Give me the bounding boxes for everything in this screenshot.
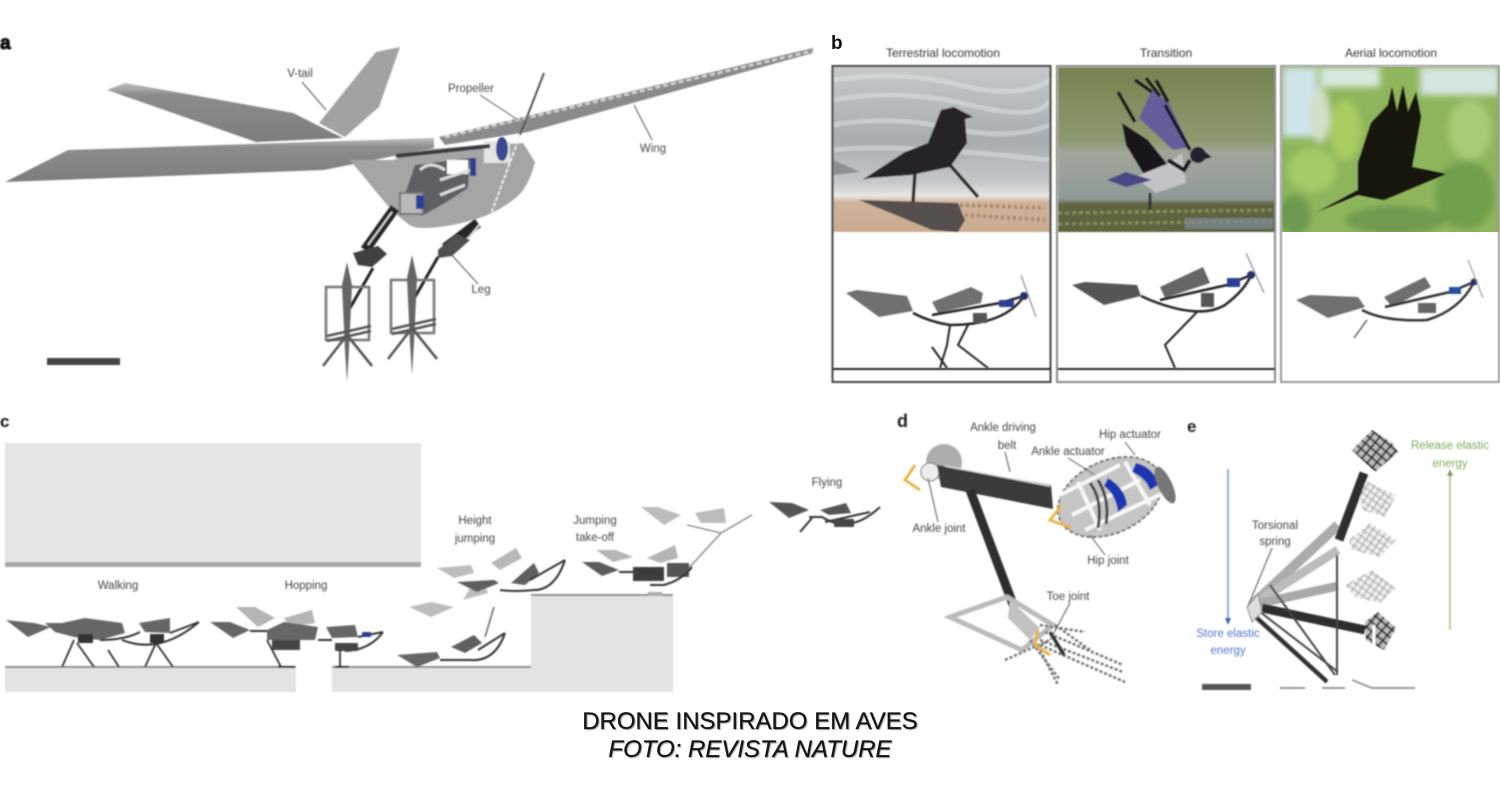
scale bar e (1202, 684, 1251, 690)
label hip actuator: Hip actuator (1099, 429, 1161, 441)
label: wing: Wing (640, 143, 666, 155)
foot frame (950, 597, 1125, 685)
label toe joint: Toe joint (1047, 591, 1090, 603)
yellow torsion springs (905, 465, 1072, 655)
label flying: Flying (812, 477, 842, 489)
pivot (1247, 594, 1262, 622)
label ankle actuator: Ankle actuator (1031, 446, 1105, 458)
panel a: robot perspective view (0, 33, 813, 382)
hopping robots (210, 607, 383, 667)
panel letter a: a (0, 33, 11, 54)
linkage rods (1250, 555, 1338, 680)
base traces (1280, 680, 1415, 688)
label height jumping: jumping (454, 533, 495, 545)
label height jumping: Height (458, 515, 492, 527)
diagram: robot walking (846, 275, 1036, 368)
caption (582, 708, 918, 763)
panel letter d: d (897, 411, 908, 431)
right wing (439, 48, 813, 145)
label torsional spring: spring (1259, 536, 1291, 548)
store energy arrow (1196, 469, 1260, 657)
diagram: robot flight (1296, 260, 1483, 338)
label hopping: Hopping (285, 580, 327, 592)
shin (970, 490, 1014, 607)
height jumping robots (397, 548, 565, 667)
label: leg (450, 253, 491, 296)
label: V-tail (287, 68, 326, 110)
dark leg bottom position (1262, 608, 1396, 650)
label ankle driving belt: belt (998, 440, 1017, 452)
caption: DRONE INSPIRADO EM AVES (582, 708, 918, 735)
label ankle actuator (1031, 446, 1105, 475)
label: propeller (448, 83, 518, 120)
release energy arrow (1411, 440, 1489, 630)
heading aerial: Aerial locomotion (1345, 46, 1437, 60)
label hip actuator (1099, 429, 1161, 455)
left wing (5, 138, 434, 182)
label jumping take-off (573, 515, 617, 544)
dark leg top position (1339, 430, 1398, 540)
store energy arrow: Store elastic (1196, 628, 1260, 640)
ground (5, 595, 673, 692)
flying robot (769, 502, 880, 532)
caption: FOTO: REVISTA NATURE (608, 736, 892, 763)
label hip joint: Hip joint (1087, 555, 1130, 567)
left leg (323, 208, 395, 382)
label: propeller: Propeller (448, 83, 494, 95)
photo: crow in flight (1279, 67, 1499, 235)
heading terrestrial: Terrestrial locomotion (886, 46, 1000, 60)
label ankle joint: Ankle joint (912, 523, 966, 535)
release energy arrow: Release elastic (1411, 440, 1489, 452)
tail fin (319, 47, 400, 137)
label torsional spring: Torsional (1252, 520, 1298, 532)
photo: walking crow (833, 67, 1050, 232)
wall block (5, 443, 421, 567)
panel c: multimodal locomotion sequence (0, 412, 880, 692)
panel d: leg mechanism (897, 411, 1180, 685)
hip actuator cage (1045, 441, 1180, 553)
walking robots (6, 618, 199, 667)
heading transition: Transition (1140, 46, 1192, 60)
ghost leg positions (1252, 477, 1396, 605)
label toe joint (1047, 591, 1090, 640)
label ankle joint (912, 478, 966, 535)
fuselage hull (350, 143, 535, 228)
ankle joint disk (921, 444, 962, 481)
label jumping take-off: take-off (576, 532, 615, 544)
panel letter e: e (1187, 417, 1196, 436)
panel letter b: b (831, 33, 843, 54)
diagram: robot transition (1072, 253, 1264, 368)
label walking: Walking (98, 580, 138, 592)
panel e: elastic energy leg sequence (1187, 417, 1489, 690)
thigh and belt (937, 465, 1053, 509)
release energy arrow: energy (1432, 458, 1468, 470)
label ankle driving belt (970, 422, 1036, 472)
store energy arrow: energy (1210, 645, 1246, 657)
panel b: bird and robot locomotion comparison (831, 33, 1499, 382)
label: wing (634, 105, 666, 155)
frames (832, 66, 1499, 382)
label torsional spring (1248, 520, 1298, 606)
label height jumping (454, 515, 495, 545)
jumping take-off robots (582, 507, 752, 596)
label ankle driving belt: Ankle driving (970, 422, 1036, 434)
horizontal tail (107, 83, 343, 142)
panel letter c: c (0, 412, 9, 431)
label jumping take-off: Jumping (573, 515, 617, 527)
label hip joint (1087, 535, 1130, 567)
label: V-tail: V-tail (287, 68, 313, 80)
photo: hooded crow taking off (1058, 67, 1275, 232)
propeller (491, 73, 544, 214)
label: leg: Leg (471, 284, 491, 296)
scale bar a (47, 358, 120, 365)
internal mechanism (396, 137, 510, 216)
right leg (388, 223, 480, 375)
